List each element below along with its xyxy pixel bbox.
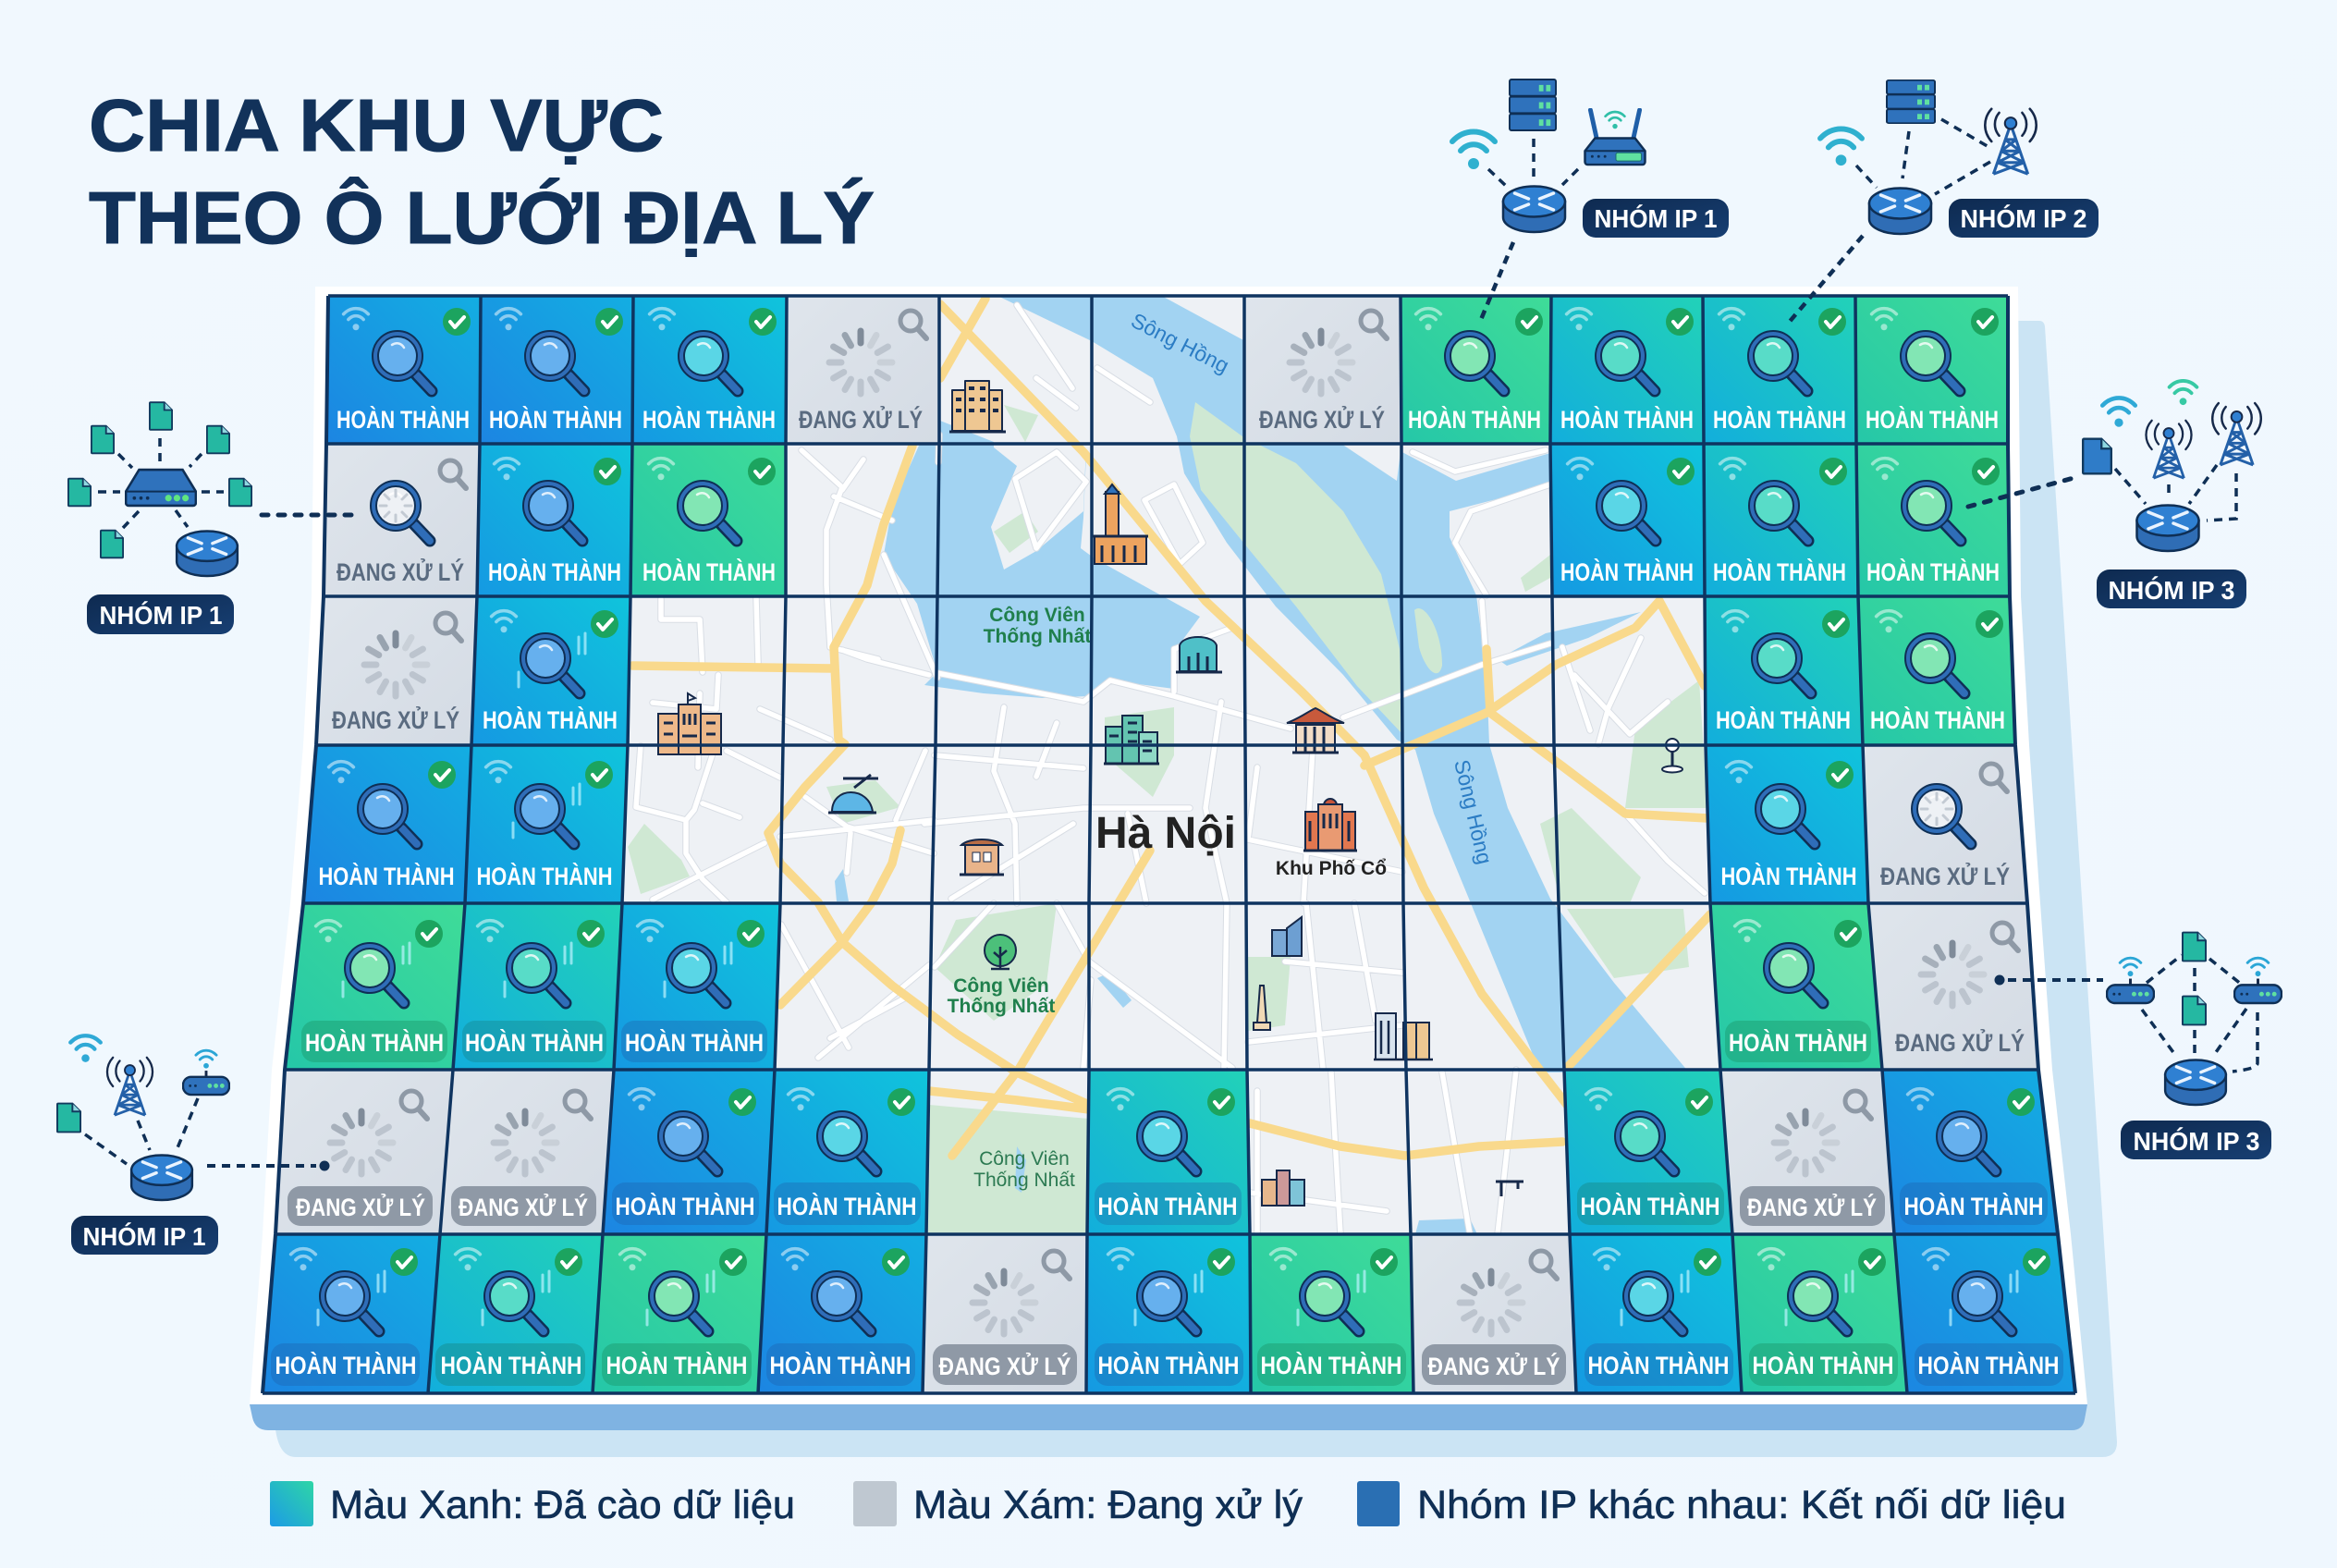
icons [1108,1248,1235,1331]
cell r5c5 [1087,1070,1250,1234]
legend text: blue: Nhóm IP khác nhau: Kết nối dữ liệu [1417,1483,2066,1527]
icon: obelisk [1254,986,1270,1030]
status: ĐANG XỬ LÝ [1427,1351,1560,1380]
connectors [2115,465,2236,521]
cell r0c3 [786,296,939,444]
status: HOÀN THÀNH [1098,1351,1239,1379]
icons [1595,1248,1721,1331]
status: ĐANG XỬ LÝ [332,704,459,734]
icon: wifi green [2170,381,2196,405]
cell r4c0 [285,903,465,1070]
status: ĐANG XỬ LÝ [1895,1027,2025,1057]
icons [1271,1248,1398,1331]
badge: NHÓM IP 1 [83,1222,205,1251]
icon: router [2165,1060,2226,1105]
icons [789,1088,915,1171]
cell r0c6 [1244,296,1401,444]
icon: server [1510,80,1556,130]
icon: small office [1262,1170,1304,1206]
legend swatch: gray [853,1481,897,1526]
icon: router [177,531,238,576]
cell r5c10 [1882,1070,2058,1234]
status: ĐANG XỬ LÝ [939,1351,1071,1380]
map label: Cong Vien Thong Nhat 1: Công Viên [989,605,1085,626]
icon: server [1887,80,1935,123]
icons [1921,923,2018,1006]
status: HOÀN THÀNH [1753,1351,1893,1379]
icons [1924,1248,2050,1331]
cell r6c8 [1570,1234,1742,1393]
icons [1290,311,1387,394]
status: HOÀN THÀNH [642,557,776,586]
icon: pagoda gate [1287,708,1344,753]
west lake [884,421,1200,698]
minor roads [636,305,1705,1234]
status: HOÀN THÀNH [642,405,776,434]
cell r3c1 [465,745,628,903]
icons [478,920,605,1003]
icon: access point right [2234,958,2282,1003]
map label: Khu Pho Co: Khu Phố Cổ [1276,858,1387,879]
icons [1719,308,1846,391]
icons [1774,1091,1871,1174]
icons [494,1091,591,1174]
status: HOÀN THÀNH [336,405,470,434]
cell r0c0 [326,296,481,444]
cell r6c9 [1732,1234,1907,1393]
status: HOÀN THÀNH [1729,1028,1867,1057]
status: HOÀN THÀNH [1560,405,1694,434]
icons [456,1248,582,1331]
icons [1908,1088,2035,1171]
icon: file [57,1104,80,1132]
icons [1872,308,1999,391]
status: HOÀN THÀNH [1917,1351,2060,1379]
parks and green zones [628,402,1707,1234]
main yellow roads [632,299,1710,1156]
icons [1759,1248,1886,1331]
grid lines [263,296,2075,1393]
status: HOÀN THÀNH [625,1028,764,1057]
icons [1877,610,2003,693]
icons [650,308,777,391]
icon: hotel [949,381,1006,432]
cell r5c3 [766,1070,929,1234]
map label: Cong Vien Thong Nhat 3: Thống Nhất [973,1170,1075,1191]
icons [1723,610,1850,693]
status: ĐANG XỬ LÝ [296,1192,425,1221]
icon: file [2083,439,2111,473]
grid of status cells [263,296,2075,1393]
title: CHIA KHU VỰC [89,84,664,166]
connector: top IP 1 to grid [1480,242,1513,322]
cell r2c1 [471,596,630,745]
status: ĐANG XỬ LÝ [459,1192,588,1221]
icon: office block [1104,716,1159,764]
status: HOÀN THÀNH [489,405,622,434]
icon: device [126,470,196,506]
network cluster: right upper NHÓM IP 3 [2083,381,2261,608]
cell r1c10 [1856,444,2010,596]
cell r1c9 [1704,444,1858,596]
icons [1416,308,1543,391]
badge [71,1216,218,1255]
icons [364,613,461,696]
icons [1735,920,1862,1003]
title [89,84,875,259]
cell r4c2 [614,903,780,1070]
cell r1c1 [477,444,632,596]
status: ĐANG XỬ LÝ [1747,1192,1877,1221]
status: HOÀN THÀNH [1581,1192,1719,1220]
cell r3c9 [1706,745,1868,903]
status: HOÀN THÀNH [305,1028,444,1057]
cell r0c7 [1401,296,1551,444]
status: HOÀN THÀNH [1870,705,2005,734]
title: THEO Ô LƯỚI ĐỊA LÝ [89,177,875,259]
legend text: gray: Màu Xám: Đang xử lý [913,1483,1303,1527]
badge: NHÓM IP 1 [1594,204,1718,233]
status: HOÀN THÀNH [1721,862,1856,890]
status: HOÀN THÀNH [1408,405,1541,434]
map of Hanoi [624,298,1719,1233]
icon: wifi blue [2102,398,2135,427]
cell r1c8 [1550,444,1705,596]
status: HOÀN THÀNH [483,705,618,734]
icons [1460,1251,1557,1334]
status: HOÀN THÀNH [616,1192,754,1220]
badge: NHÓM IP 3 [2108,576,2235,605]
icons [1567,308,1694,391]
badge [1583,199,1729,238]
cell r2c9 [1705,596,1863,745]
cell r6c5 [1086,1234,1251,1393]
cell r0c9 [1703,296,1856,444]
map label: Ha Noi: Hà Nội [1095,809,1236,858]
connector: left IP 1 to grid [262,512,358,518]
board: base layers [250,287,2117,1457]
icons [783,1248,910,1331]
icons [638,920,765,1003]
status: HOÀN THÀNH [1713,557,1846,586]
connectors [98,438,224,528]
icons [371,460,466,541]
cell r4c9 [1710,903,1882,1070]
icon: tower 2 [2212,403,2261,465]
network cluster: right lower NHÓM IP 3 [2107,933,2282,1159]
cell r0c2 [632,296,787,444]
badge [2097,570,2246,608]
connector: right lower IP 3 to grid [1995,974,2103,986]
badge: NHÓM IP 3 [2134,1127,2259,1156]
status: HOÀN THÀNH [769,1351,912,1379]
icons [1108,1088,1235,1171]
icons [1586,1088,1713,1171]
status: HOÀN THÀNH [440,1351,582,1379]
icon: tower [107,1058,153,1115]
badge: NHÓM IP 1 [100,601,222,630]
cell r5c8 [1564,1070,1732,1234]
status: ĐANG XỬ LÝ [1259,404,1385,434]
cell r1c0 [324,444,480,596]
cell r4c10 [1868,903,2038,1070]
cell r6c3 [758,1234,926,1393]
map label: Cong Vien Thong Nhat 2: Công Viên [953,975,1049,997]
cell r1c2 [630,444,786,596]
network cluster: left NHÓM IP 1 [68,402,251,634]
icons [316,920,443,1003]
connectors [1856,119,1990,194]
icon: tower 1 [2146,421,2192,478]
status: HOÀN THÀNH [275,1351,416,1379]
river Song Hong [994,294,1689,1072]
legend swatch: green [270,1481,313,1526]
icons [486,761,613,844]
legend swatch: blue [1357,1481,1400,1526]
icon: small house [960,839,1004,875]
status: HOÀN THÀNH [606,1351,747,1379]
status: HOÀN THÀNH [1098,1192,1237,1220]
icon: tower [1985,109,2037,174]
icons [620,1248,747,1331]
icons [291,1248,418,1331]
icon: tree [985,935,1016,969]
peninsula [991,442,1086,570]
cell r5c2 [603,1070,775,1234]
icon: access point left [2107,958,2154,1003]
icon: wifi [1820,129,1862,165]
icon: government building [658,693,721,754]
cell r4c1 [453,903,622,1070]
status: HOÀN THÀNH [1560,557,1694,586]
icon: router [131,1155,192,1200]
legend text: green: Màu Xanh: Đã cào dữ liệu [330,1483,795,1527]
ponds [835,612,1641,1234]
icon: wireless router [1585,110,1646,165]
status: HOÀN THÀNH [1716,705,1851,734]
cell r5c0 [275,1070,453,1234]
icons [649,458,776,541]
icon: blue dome [828,775,878,813]
map label: Song Hong top: Sông Hồng [1127,308,1233,378]
icon: twin buildings [1374,1013,1433,1060]
cell r5c1 [440,1070,614,1234]
map label: Song Hong right: Sông Hồng [1450,757,1497,866]
legend [270,1481,2066,1527]
icon group: files [68,402,251,557]
cell r2c0 [316,596,477,745]
network cluster: lower-left NHÓM IP 1 [57,1035,229,1255]
cell r5c9 [1720,1070,1894,1234]
status: HOÀN THÀNH [1588,1351,1729,1379]
cell r0c8 [1550,296,1704,444]
icon: glass towers [1272,917,1302,956]
icons [1727,761,1854,844]
icon: access point [183,1050,229,1095]
icons [1720,458,1847,541]
cell r3c0 [303,745,471,903]
icon: router [1503,187,1565,232]
status: HOÀN THÀNH [488,557,621,586]
badge [2121,1121,2271,1159]
cell r0c1 [480,296,633,444]
network cluster: top NHÓM IP 1 [1452,80,1729,238]
connectors [85,1098,198,1164]
icons [1873,458,2000,541]
icon: clock tower [1093,484,1148,564]
cell r6c7 [1411,1234,1576,1393]
map label: Cong Vien Thong Nhat 1: Thống Nhất [984,626,1091,647]
status: HOÀN THÀNH [318,862,455,890]
connectors [1488,139,1578,186]
icons [344,308,471,391]
icons [1912,764,2007,844]
icon: wifi [1452,131,1495,169]
badge [1949,199,2098,238]
icons [973,1251,1070,1334]
cell r6c6 [1250,1234,1413,1393]
status: ĐANG XỬ LÝ [799,404,923,434]
cell r6c1 [428,1234,603,1393]
icon: router [1869,189,1931,234]
cell r6c4 [923,1234,1087,1393]
icons [492,610,618,693]
icons [496,308,623,391]
connector: right upper IP 3 to grid [1968,478,2074,507]
cell r6c2 [593,1234,766,1393]
map label: Cong Vien Thong Nhat 3: Công Viên [979,1148,1070,1170]
badge: NHÓM IP 2 [1960,204,2087,233]
status: HOÀN THÀNH [465,1028,604,1057]
icon: router [2137,505,2198,551]
icon: map pin [1662,739,1682,773]
connectors [2142,955,2257,1072]
cell r6c10 [1894,1234,2075,1393]
status: HOÀN THÀNH [1904,1192,2043,1220]
status: HOÀN THÀNH [477,862,612,890]
icons [829,311,926,394]
icon: domed temple [1176,637,1222,672]
connector: top IP 2 to grid [1788,236,1863,324]
status: ĐANG XỬ LÝ [336,557,464,586]
map label: Cong Vien Thong Nhat 2: Thống Nhất [948,996,1055,1017]
icons [495,458,621,541]
connector: lower-left IP 1 to grid [207,1161,329,1170]
badge [87,594,234,634]
cell r0c10 [1855,296,2008,444]
status: HOÀN THÀNH [1261,1351,1401,1379]
icons [330,1091,427,1174]
cell r6c0 [263,1234,440,1393]
icon group: files [2183,933,2206,1024]
icon: red building [1303,799,1357,851]
status: HOÀN THÀNH [1866,405,1999,434]
network cluster: top NHÓM IP 2 [1820,80,2098,238]
status: HOÀN THÀNH [1866,557,2000,586]
icons [630,1088,756,1171]
status: ĐANG XỬ LÝ [1880,861,2010,890]
status: HOÀN THÀNH [777,1192,917,1220]
status: HOÀN THÀNH [1713,405,1846,434]
icons [329,761,456,844]
icons [1568,458,1695,541]
cell r2c10 [1858,596,2015,745]
cell r3c10 [1863,745,2027,903]
icon: wifi [70,1035,101,1062]
icon: shelter [1496,1182,1523,1196]
